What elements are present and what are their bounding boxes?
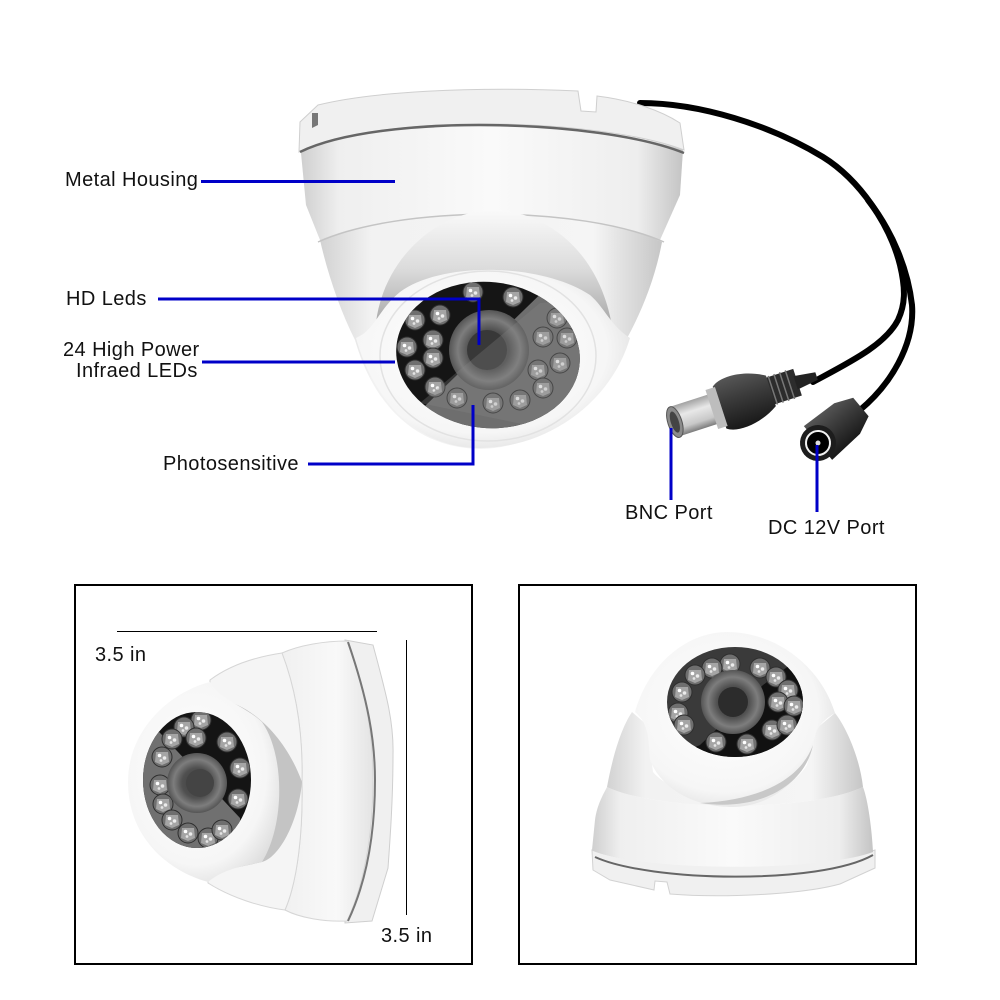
callout: Photosensitive: Photosensitive: [163, 453, 299, 475]
callout: HD Leds: HD Leds: [66, 288, 147, 310]
upper housing: [301, 126, 683, 240]
front camera ball: [635, 632, 835, 807]
callout: 24 High Power Infraed LEDs: [63, 339, 395, 382]
side camera ball: [128, 682, 279, 882]
side socket: [222, 700, 302, 872]
front groove: [595, 855, 873, 877]
lower dome: [320, 214, 662, 449]
front housing: [592, 787, 873, 867]
front socket shadow: [700, 745, 813, 805]
notch: [312, 113, 318, 128]
callout: BNC Port: [625, 428, 713, 524]
side camera housing: [282, 641, 373, 921]
translucent diagonal band: [426, 296, 580, 428]
side groove: [348, 642, 375, 921]
socket recess: [376, 210, 612, 326]
vertical dimension label: 3.5 in: [381, 925, 432, 947]
panel: side view with dimensions: [75, 585, 472, 964]
callout: 24 High Power Infraed LEDs: Infraed LEDs: [76, 360, 198, 382]
callout: DC 12V Port: [768, 445, 885, 539]
side camera flange: [345, 640, 393, 923]
bezel edge: [380, 271, 596, 441]
main dome camera: [299, 89, 684, 449]
lens window: [396, 282, 580, 428]
camera ball: [356, 270, 630, 448]
side lens window: [143, 712, 251, 848]
panel: front view: [519, 585, 916, 964]
housing groove: [300, 125, 684, 153]
side middle dome: [208, 653, 302, 910]
callout: HD Leds: [66, 288, 479, 345]
camera cables: [640, 103, 912, 410]
vertical dimension line: [406, 640, 408, 915]
horizontal dimension line: [117, 630, 377, 632]
callout: 24 High Power Infraed LEDs: 24 High Power: [63, 339, 200, 361]
callout: DC 12V Port: DC 12V Port: [768, 517, 885, 539]
front lens window: [667, 647, 803, 757]
front dome: [607, 712, 863, 806]
callout: Photosensitive: [163, 405, 473, 475]
front flange: [592, 850, 875, 896]
horizontal dimension label: 3.5 in: [95, 644, 146, 666]
BNC connector: [660, 351, 825, 450]
flange: [299, 89, 684, 152]
DC power connector: [790, 390, 875, 471]
callout: BNC Port: BNC Port: [625, 502, 713, 524]
callout: Metal Housing: Metal Housing: [65, 169, 198, 191]
